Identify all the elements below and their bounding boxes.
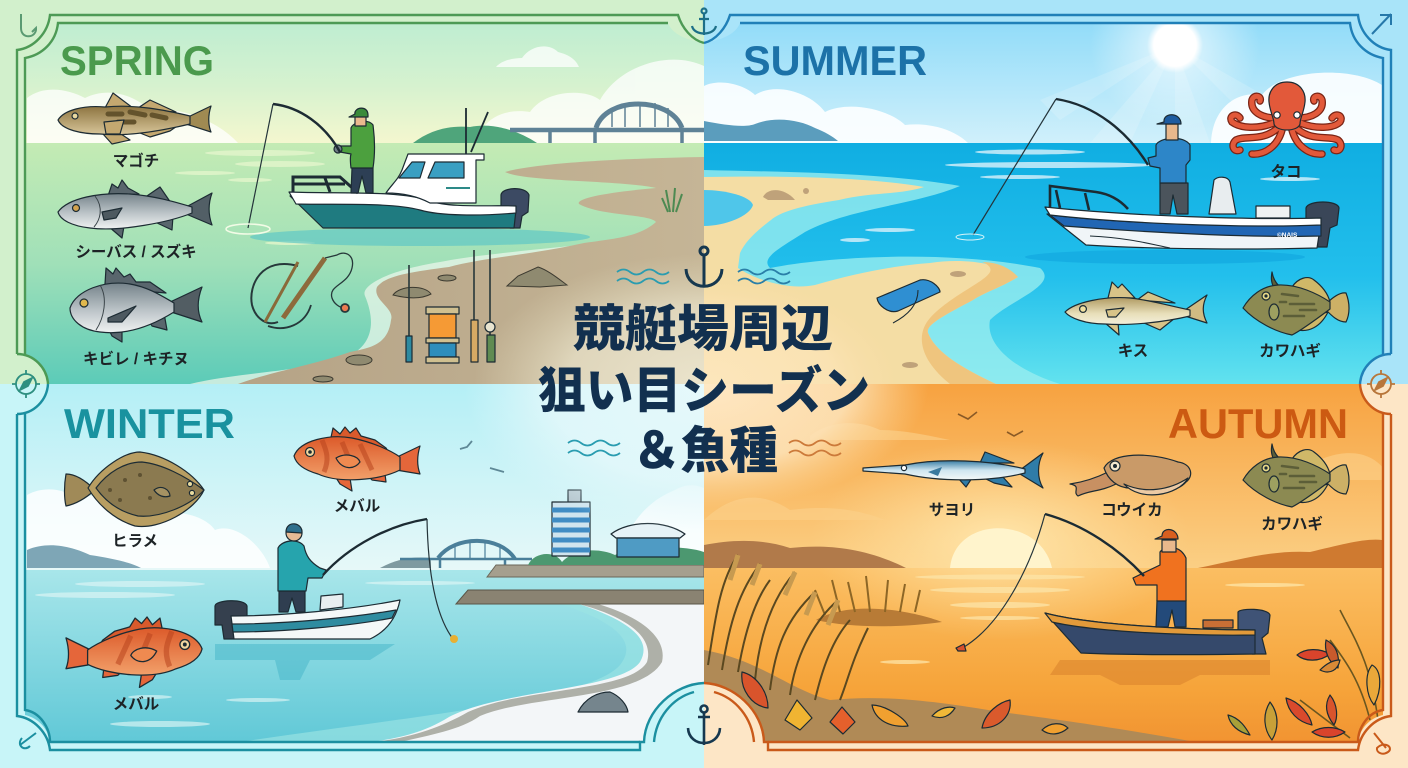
console xyxy=(1209,177,1236,214)
shore: autumn xyxy=(704,650,1195,742)
boat: winter xyxy=(215,594,400,639)
right foliage xyxy=(1228,610,1380,740)
mountains: autumn left xyxy=(704,541,906,568)
fish: filefish summer xyxy=(1243,272,1349,335)
label: kibire: キビレ / キチヌ xyxy=(83,349,189,368)
boat: autumn xyxy=(1045,609,1270,655)
tackle: lure and rod icon xyxy=(251,253,353,328)
panel: winter xyxy=(25,384,704,741)
fish: filefish autumn xyxy=(1243,444,1349,507)
anchor: top xyxy=(692,8,716,35)
water ripples xyxy=(175,150,325,245)
snowy shore xyxy=(373,600,704,742)
mountains xyxy=(27,545,141,568)
fishing line xyxy=(973,99,1056,235)
lure xyxy=(450,635,458,643)
frame: winter xyxy=(17,384,704,750)
fish: kisu xyxy=(1065,282,1207,335)
beach xyxy=(238,157,704,384)
waves: lower left xyxy=(568,440,620,456)
rod xyxy=(1056,99,1148,165)
summer glow xyxy=(704,281,851,384)
bridge: winter xyxy=(400,541,532,568)
water highlights xyxy=(880,574,1305,664)
far headland xyxy=(380,557,431,568)
clouds: summer xyxy=(704,73,1382,143)
shore grey band xyxy=(373,604,663,742)
line ripple xyxy=(226,224,270,234)
fishing line xyxy=(248,104,273,228)
angler: summer xyxy=(1056,99,1190,214)
rod xyxy=(273,104,340,152)
rock xyxy=(578,692,628,712)
anchor: title xyxy=(686,247,722,286)
lower pier xyxy=(456,590,704,604)
bobber xyxy=(956,644,966,651)
sun rays xyxy=(1040,45,1290,143)
trees xyxy=(528,547,704,565)
corner icon: bottom left hook xyxy=(20,733,36,748)
birds: autumn xyxy=(958,412,1023,436)
birds xyxy=(460,441,504,472)
rod xyxy=(323,519,427,575)
fish: magochi xyxy=(58,93,211,144)
heading: summer: SUMMER xyxy=(743,37,927,84)
label: octopus: タコ xyxy=(1270,163,1302,181)
tackle: rods and spool xyxy=(406,250,495,363)
boat: summer xyxy=(1045,177,1339,249)
frame: spring xyxy=(17,15,704,384)
corner hook: top left xyxy=(21,14,36,36)
setting sun xyxy=(950,528,1052,568)
fishing line xyxy=(427,519,453,639)
clouds: winter xyxy=(27,485,704,568)
hull xyxy=(1047,214,1321,249)
boat mark: ©NAIS xyxy=(1277,231,1298,239)
console xyxy=(320,594,343,610)
fishing line xyxy=(964,514,1045,647)
corner icon: bottom right hook xyxy=(1374,733,1390,754)
label: sayori: サヨリ xyxy=(929,501,975,519)
angler: winter xyxy=(278,519,427,612)
hull xyxy=(290,196,516,228)
frame: summer xyxy=(704,15,1391,384)
heading: spring: SPRING xyxy=(60,37,214,84)
octopus xyxy=(1231,82,1341,154)
margin: summer xyxy=(704,0,1408,384)
label: mebaru upper: メバル xyxy=(334,498,381,515)
cooler xyxy=(1256,206,1290,218)
sun xyxy=(1090,0,1260,130)
fish: mebaru lower xyxy=(66,617,202,687)
beach stones xyxy=(313,267,567,382)
angler: autumn xyxy=(1045,514,1186,627)
antennas xyxy=(466,108,488,154)
cuttlefish xyxy=(1070,455,1191,496)
title line 2: 狙い目シーズン xyxy=(538,363,870,419)
cabin xyxy=(386,154,484,203)
headings xyxy=(60,37,1348,447)
sandbar shade xyxy=(922,262,1018,384)
sand stones xyxy=(763,188,966,368)
title group xyxy=(538,247,870,479)
compass: right xyxy=(1367,370,1395,398)
water sparkle xyxy=(840,150,1320,242)
title line 3: ＆魚種 xyxy=(632,423,778,479)
rail xyxy=(293,177,358,193)
water highlights: winter xyxy=(35,581,475,727)
rail xyxy=(1050,186,1128,210)
panel: autumn xyxy=(704,384,1383,742)
fish: kibire xyxy=(70,268,202,342)
boat reflection xyxy=(1050,660,1270,685)
label: kisu: キス xyxy=(1118,343,1148,360)
sandbar xyxy=(704,177,1018,384)
building xyxy=(552,490,590,556)
label: sea bass: シーバス / スズキ xyxy=(75,242,197,261)
shore water xyxy=(240,600,704,742)
reed island xyxy=(815,576,942,626)
margin: spring xyxy=(0,0,704,384)
clouds: spring xyxy=(27,46,704,143)
motor xyxy=(501,189,529,228)
heading: autumn: AUTUMN xyxy=(1168,400,1348,447)
winter glow xyxy=(482,384,704,530)
label: flounder: ヒラメ xyxy=(112,533,158,550)
anchor: bottom xyxy=(688,706,720,745)
margin: autumn xyxy=(704,384,1408,768)
mountain xyxy=(704,120,838,141)
label: mebaru lower: メバル xyxy=(113,696,160,713)
fallen leaves xyxy=(742,672,1068,734)
frame: autumn xyxy=(704,384,1391,750)
panel: summer xyxy=(704,23,1382,384)
sandbar foam xyxy=(704,170,1060,384)
pool xyxy=(704,190,753,226)
tackle case xyxy=(877,280,940,323)
label: filefish summer: カワハギ xyxy=(1259,342,1321,360)
motor xyxy=(215,601,247,639)
margin: winter xyxy=(0,384,704,768)
line ripple xyxy=(956,234,984,240)
boat shadow xyxy=(1025,250,1305,264)
rod xyxy=(1045,514,1144,576)
bridge xyxy=(510,102,704,143)
label: magochi: マゴチ xyxy=(113,151,159,170)
upper pier xyxy=(487,565,704,577)
beach foam xyxy=(190,230,704,384)
heading: winter: WINTER xyxy=(64,400,235,447)
autumn glow xyxy=(704,384,921,502)
fish: sea bass xyxy=(58,180,212,238)
boat: spring xyxy=(289,108,529,228)
clouds: autumn xyxy=(704,423,1385,520)
fish: sayori xyxy=(863,452,1043,488)
fish: mebaru upper xyxy=(294,427,420,491)
boat reflection xyxy=(215,644,395,680)
compass: left xyxy=(12,370,40,398)
island xyxy=(413,126,537,143)
grass tuft xyxy=(662,188,682,212)
corner icon: top right rod xyxy=(1372,14,1391,34)
motor xyxy=(1306,202,1339,247)
angler: spring xyxy=(273,104,374,193)
sun glow xyxy=(810,440,1190,640)
beach glow xyxy=(496,270,704,384)
reeds xyxy=(708,555,868,700)
fish: flounder xyxy=(64,452,204,527)
label: filefish autumn: カワハギ xyxy=(1261,515,1323,533)
label: cuttlefish: コウイカ xyxy=(1101,501,1163,519)
panel: spring xyxy=(26,23,704,384)
waves: lower right xyxy=(789,440,841,456)
title line 1: 競艇場周辺 xyxy=(573,301,833,357)
terminal xyxy=(611,524,685,557)
mountains: autumn right xyxy=(1198,540,1382,568)
hull xyxy=(231,600,400,639)
waves: title left xyxy=(617,270,669,284)
waves: title right xyxy=(738,270,790,284)
